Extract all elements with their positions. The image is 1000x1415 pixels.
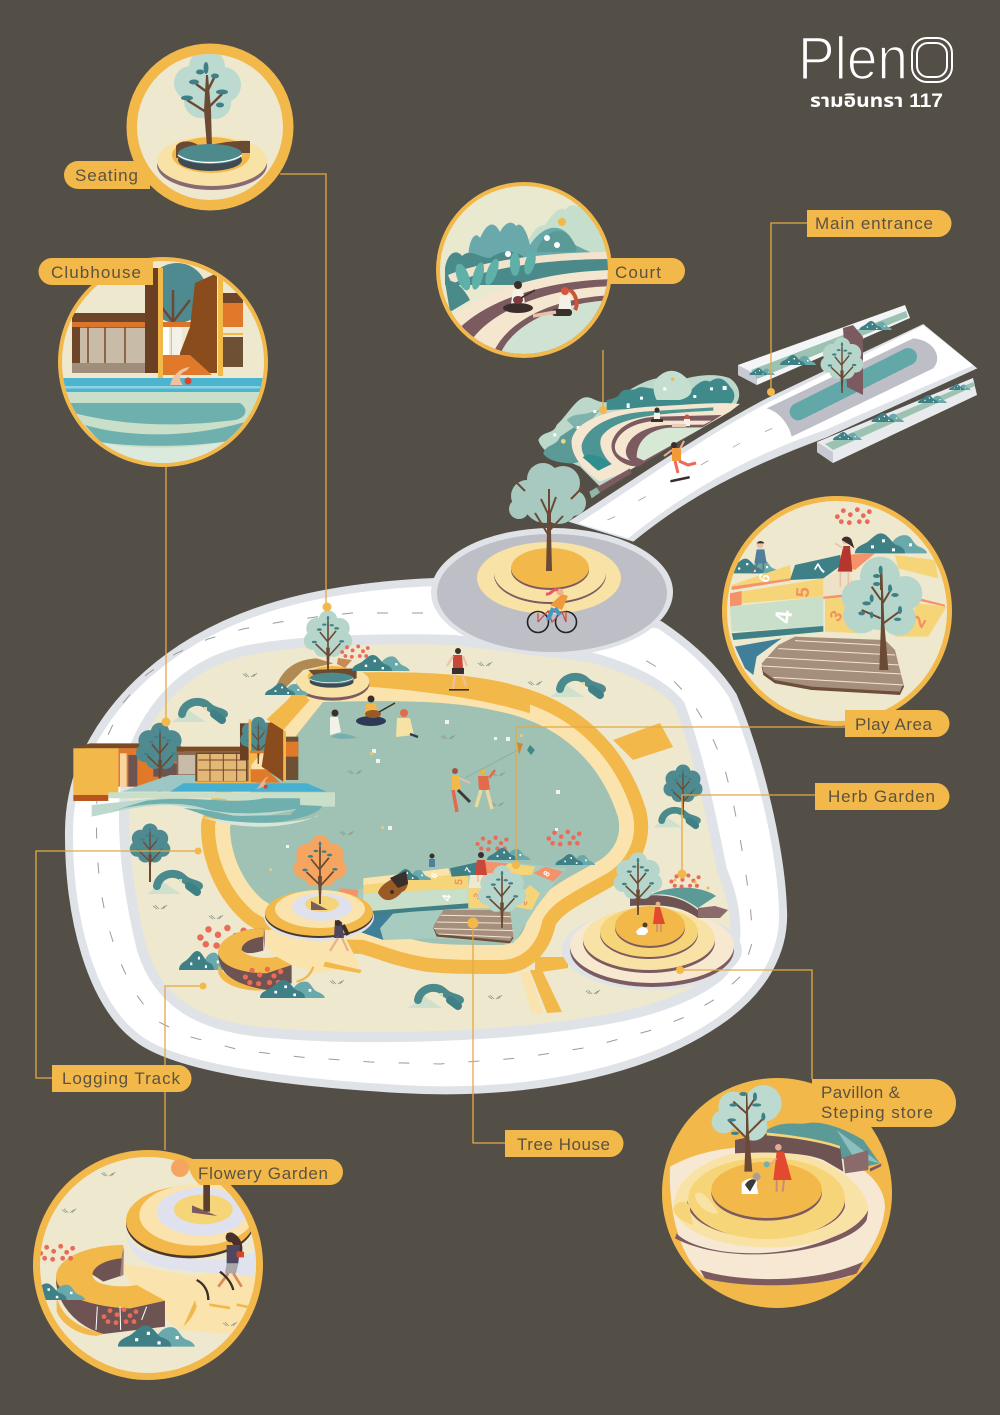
jogging path band xyxy=(230,701,619,945)
entrance pool xyxy=(798,357,908,412)
label xyxy=(812,1079,956,1127)
terraces xyxy=(108,792,335,807)
jogger xyxy=(334,920,344,938)
entrance plaza and road xyxy=(568,324,977,542)
panel: pavilion and stepping store xyxy=(662,1078,956,1308)
teal hills xyxy=(468,222,590,258)
label: logging track: Logging Track xyxy=(62,1069,180,1088)
lady xyxy=(775,1144,782,1151)
panel: pavilion and stepping store: Steping store xyxy=(821,1103,933,1122)
play area on map: 7 xyxy=(463,866,474,875)
play area on map: 5 xyxy=(453,879,465,886)
panel: seating xyxy=(64,44,294,210)
label: herb garden: Herb Garden xyxy=(828,787,935,806)
entrance tree and gate xyxy=(821,325,863,395)
side paths xyxy=(520,723,673,1014)
left teal tree xyxy=(149,850,151,882)
girl xyxy=(842,540,848,544)
panel: play area: 4 xyxy=(770,609,797,624)
panel: play area: 6 xyxy=(755,571,774,585)
roundabout tree xyxy=(509,463,586,571)
pool xyxy=(122,775,327,792)
seating tree and surrounding plants xyxy=(265,610,410,695)
label: Court xyxy=(615,263,661,282)
tree xyxy=(712,1085,782,1141)
flowery garden C-bench on map xyxy=(218,927,362,991)
play area on map: 8 xyxy=(541,869,552,878)
guitarist xyxy=(514,281,522,289)
panel: play area: 5 xyxy=(791,586,813,598)
court people and skateboarder xyxy=(651,408,696,483)
label: herb garden xyxy=(815,783,950,810)
play area on map: 4 xyxy=(439,893,454,902)
clubhouse on map xyxy=(73,717,335,827)
panel: flowery garden: Flowery Garden xyxy=(198,1164,328,1183)
kite flyers xyxy=(452,768,458,774)
court terraces xyxy=(572,403,740,498)
cyclist xyxy=(528,588,576,632)
grass area xyxy=(124,639,735,1037)
label: tree house: Tree House xyxy=(517,1135,610,1154)
play area on map: 2 xyxy=(518,897,530,907)
bushes beside the flowery garden xyxy=(179,925,247,970)
panel: clubhouse xyxy=(38,257,275,470)
logo: Pleno Ramintra 117 xyxy=(798,25,952,112)
panel: flowery garden xyxy=(25,1150,343,1380)
orange tree plaza xyxy=(264,835,374,941)
play area on map: 6 xyxy=(428,871,440,880)
road loop xyxy=(69,582,783,1090)
kites xyxy=(517,742,523,755)
roundabout xyxy=(431,463,673,656)
play area on map: 3 xyxy=(471,891,483,901)
logo: Pleno Ramintra 117: Plen xyxy=(798,25,908,92)
panel: play area: 2 xyxy=(907,612,930,631)
central lawn xyxy=(230,701,619,945)
seating plaza on map xyxy=(267,658,530,735)
cello xyxy=(378,872,408,900)
deck xyxy=(433,913,513,943)
road dashes xyxy=(607,428,772,520)
label: main entrance: Main entrance xyxy=(815,214,933,233)
lawn dots and grass ticks xyxy=(153,662,600,999)
cream wall xyxy=(448,252,612,284)
herb garden wall xyxy=(650,888,716,908)
panel: play area: 7 xyxy=(811,561,830,577)
label xyxy=(38,258,153,285)
label: Seating xyxy=(75,166,138,185)
tree xyxy=(842,557,922,636)
leader lines and dots xyxy=(36,174,845,1150)
label: logging track xyxy=(52,1065,192,1092)
top planter xyxy=(738,305,910,385)
court foliage xyxy=(538,371,739,487)
runner xyxy=(455,648,461,654)
pavilion and stepping stones on map xyxy=(562,852,742,990)
panel: clubhouse: Clubhouse xyxy=(51,263,141,282)
label: main entrance xyxy=(807,210,952,237)
child xyxy=(756,543,764,548)
panel: play area: 3 xyxy=(826,607,847,625)
map people xyxy=(330,648,535,951)
label: tree house xyxy=(505,1130,624,1157)
panel: court xyxy=(436,182,685,358)
play area on map xyxy=(328,860,567,943)
dog xyxy=(742,1179,758,1194)
panel: play area: Play Area xyxy=(855,715,933,734)
panel: pavilion and stepping store: Pavillon & xyxy=(821,1083,901,1102)
terrace arcs xyxy=(454,270,608,354)
sitting woman xyxy=(561,287,569,295)
road centre dashes xyxy=(96,613,753,1064)
label xyxy=(187,1159,343,1185)
small bushes and trees xyxy=(130,677,703,1008)
ferns xyxy=(456,252,536,290)
friends sitting xyxy=(332,710,338,716)
wall xyxy=(735,1133,843,1172)
bottom planter xyxy=(817,378,977,463)
panel: play area xyxy=(722,496,952,737)
woman xyxy=(226,1232,236,1242)
right teal tree xyxy=(664,764,702,815)
play area tree, flowers and people xyxy=(378,830,595,928)
pale mountains xyxy=(529,205,608,262)
label xyxy=(845,710,950,737)
clubhouse teal tree xyxy=(159,767,161,792)
orange tree xyxy=(293,835,347,904)
logo: Pleno Ramintra 117: รามอินทรา 117 xyxy=(810,91,943,112)
